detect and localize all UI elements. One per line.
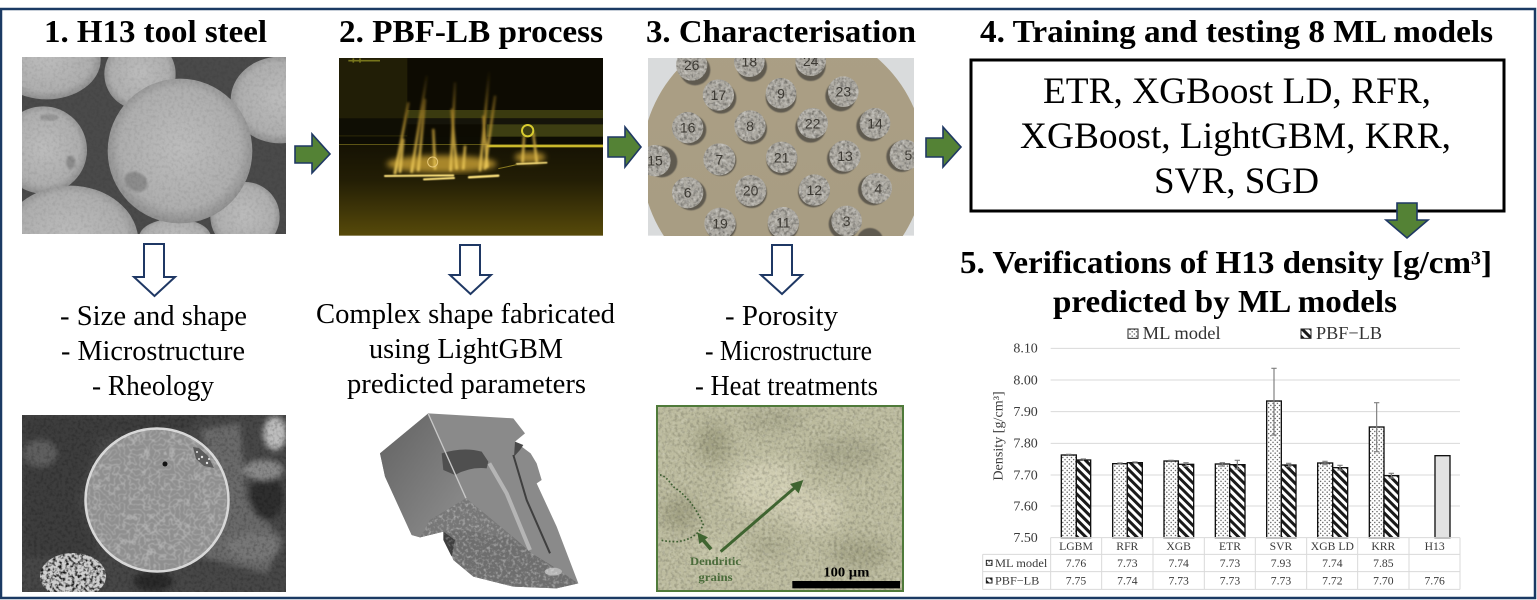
y axis tick labels: 8.00 (1013, 373, 1038, 388)
heading 3: 3. Characterisation (646, 13, 916, 49)
micrograph: dendritic grains: grains (698, 570, 733, 584)
chart legend: PBF−LB (1316, 323, 1382, 343)
data table: ML model (995, 557, 1047, 570)
photo: printed cylinders on build plate (648, 58, 914, 236)
photo: printed cylinders on build plate: 7 (715, 151, 723, 167)
data table: ETR (1219, 540, 1241, 553)
text: powder analyses: - Size and shape (60, 301, 247, 332)
data table (983, 538, 1460, 589)
data table: KRR (1371, 540, 1396, 553)
heading 5: predicted by ML models (1053, 283, 1397, 319)
data table: SVR (1270, 540, 1293, 553)
y axis tick labels: 7.80 (1013, 437, 1038, 452)
photo: printed cylinders on build plate: 3 (843, 213, 851, 229)
micrograph: dendritic grains: 100 µm (823, 565, 869, 580)
model list box: ETR, XGBoost LD, RFR, (1043, 71, 1431, 112)
arrow: step 2 to 3 (608, 127, 641, 167)
photo: printed cylinders on build plate: 21 (774, 149, 790, 165)
data table: 7.73 (1271, 575, 1291, 588)
photo: printed cylinders on build plate: 4 (874, 180, 882, 196)
text: complex shape note (316, 299, 615, 400)
y axis tick labels (1013, 342, 1038, 546)
micrograph: dendritic grains: Dendritic (690, 554, 742, 568)
3D scan of complex part (380, 413, 578, 588)
arrow: step 1 to 2 (295, 134, 330, 173)
data table: 7.76 (1424, 575, 1445, 588)
error bars (1066, 368, 1394, 478)
text: powder analyses: - Microstructure (61, 336, 245, 367)
micrograph: dendritic grains (657, 406, 903, 591)
data table: 7.74 (1117, 575, 1138, 588)
photo: printed cylinders on build plate: 22 (805, 115, 821, 131)
photo: printed cylinders on build plate: 9 (777, 85, 785, 101)
text: characterisation analyses: - Porosity (725, 301, 838, 332)
bar chart: density verification (983, 323, 1460, 589)
data table: XGB LD (1311, 540, 1354, 553)
data table: 7.73 (1117, 557, 1138, 570)
heading 4: 4. Training and testing 8 ML models (980, 13, 1493, 49)
photo: printed cylinders on build plate: 18 (742, 54, 757, 70)
text: powder analyses: - Rheology (92, 371, 214, 402)
photo: printed cylinders on build plate: 24 (803, 53, 819, 69)
photo: printed cylinders on build plate: 6 (684, 185, 692, 201)
model list box: SVR, SGD (1154, 161, 1319, 202)
photo: printed cylinders on build plate: 15 (647, 153, 663, 169)
data table: 7.73 (1220, 557, 1240, 570)
data table: 7.75 (1066, 575, 1086, 588)
outline arrow: column 1 (134, 244, 175, 296)
photo: printed cylinders on build plate: 26 (684, 57, 700, 73)
photo: printed cylinders on build plate: 17 (711, 87, 726, 103)
photo: printed cylinders on build plate: 12 (807, 182, 822, 198)
y axis tick labels: 8.10 (1013, 342, 1038, 357)
data table: XGB (1166, 540, 1191, 553)
arrow: step 3 to 4 (926, 127, 961, 167)
data table: 7.70 (1373, 575, 1394, 588)
micrograph border (657, 406, 903, 591)
data table: 7.74 (1168, 557, 1189, 570)
photo: printed cylinders on build plate: 8 (746, 118, 754, 134)
data table: 7.93 (1271, 557, 1291, 570)
y axis tick labels: 7.60 (1013, 500, 1038, 515)
data table: 7.73 (1220, 575, 1240, 588)
data table: 7.74 (1322, 557, 1343, 570)
data table: 7.76 (1066, 557, 1086, 570)
model list box: XGBoost, LightGBM, KRR, (1020, 116, 1451, 157)
y axis tick labels: 7.90 (1013, 405, 1038, 420)
photo: H13 powder SEM (22, 57, 286, 234)
outline arrow: column 3 (761, 245, 802, 294)
data table: 7.72 (1322, 575, 1343, 588)
y axis tick labels: 7.70 (1013, 468, 1038, 483)
text: characterisation analyses: - Heat treatments (695, 371, 878, 402)
photo: PBF-LB process melt plume (339, 58, 603, 236)
text: complex shape note: predicted parameters (347, 369, 586, 400)
text: complex shape note: Complex shape fabricated (316, 299, 615, 330)
chart legend: ML model (1143, 323, 1221, 343)
model list box (971, 60, 1504, 211)
heading 2: 2. PBF-LB process (339, 13, 603, 49)
data table: RFR (1116, 540, 1139, 553)
data table: LGBM (1059, 540, 1093, 553)
text: characterisation analyses: - Microstructure (705, 336, 872, 367)
chart legend (1128, 323, 1382, 343)
text: complex shape note: using LightGBM (369, 334, 563, 365)
photo: powder cross-section SEM (22, 415, 287, 599)
photo: printed cylinders on build plate: 23 (836, 84, 851, 100)
y axis title: Density [g/cm³] (991, 391, 1006, 481)
heading 5 (960, 244, 1492, 319)
photo: printed cylinders on build plate: 13 (837, 148, 853, 164)
heading 5: 5. Verifications of H13 density [g/cm³] (960, 244, 1492, 280)
photo: printed cylinders on build plate: 20 (743, 183, 759, 199)
bars (1061, 401, 1450, 538)
text: characterisation analyses (695, 301, 878, 402)
data table: PBF−LB (995, 575, 1040, 588)
outline arrow: column 2 (450, 245, 491, 294)
heading 1: 1. H13 tool steel (44, 13, 267, 49)
photo: printed cylinders on build plate: 16 (680, 120, 696, 136)
arrow: step 4 to 5 (1386, 203, 1428, 238)
data table: 7.73 (1168, 575, 1189, 588)
text: powder analyses (60, 301, 247, 402)
photo: printed cylinders on build plate: 11 (776, 215, 791, 231)
y axis tick labels: 7.50 (1013, 531, 1038, 546)
photo: printed cylinders on build plate: 14 (867, 115, 883, 131)
data table: 7.85 (1373, 557, 1394, 570)
photo: printed cylinders on build plate: 5 (904, 147, 912, 163)
data table: H13 (1425, 540, 1445, 553)
photo: printed cylinders on build plate: 19 (712, 215, 728, 231)
